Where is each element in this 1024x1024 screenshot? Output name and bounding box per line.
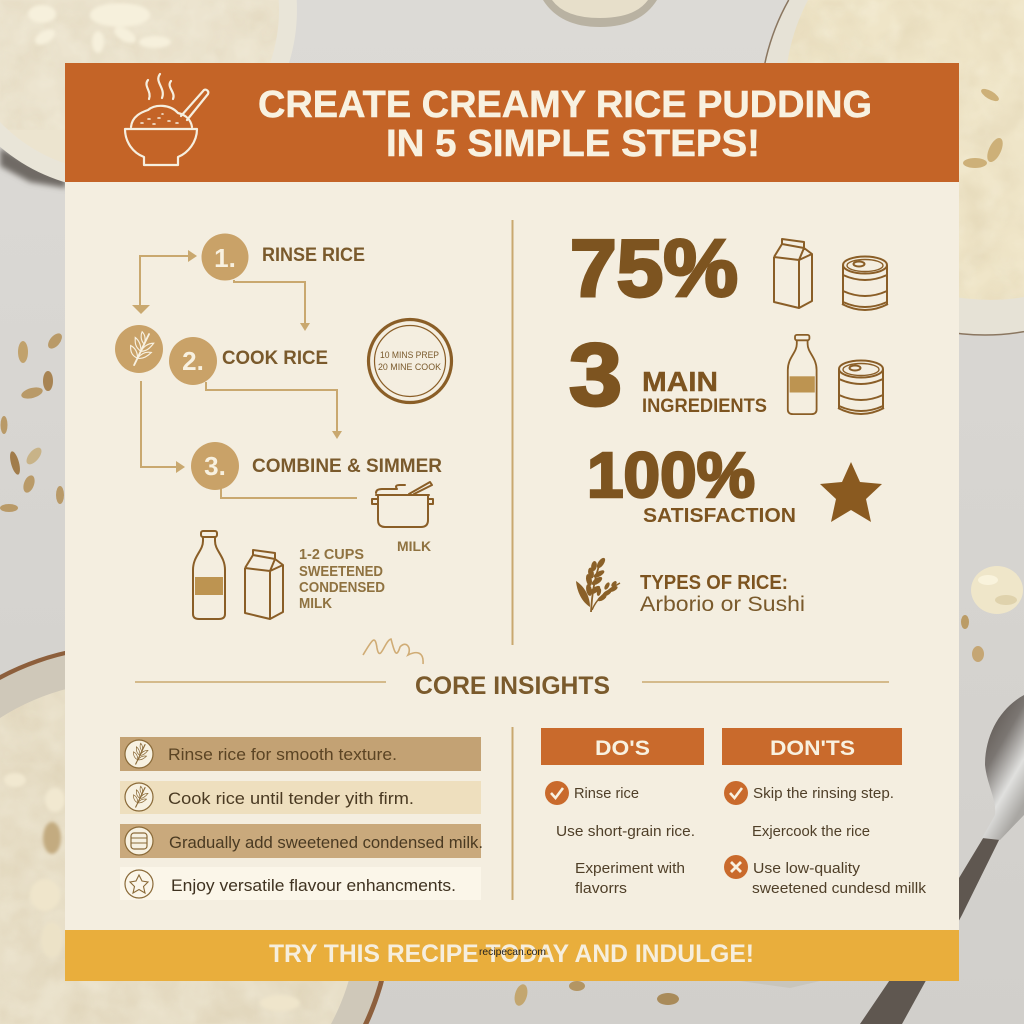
text: condensed milk quantity: [299, 547, 385, 612]
icon: wheat badge: [115, 325, 163, 373]
insight row 2: [120, 781, 481, 814]
do item: short grain rice: Use short-grain rice.: [556, 824, 695, 840]
text: condensed milk quantity: 1-2 CUPS: [299, 547, 364, 563]
timing badge: 10 MINS PREP: [380, 350, 439, 361]
panel: header banner: [65, 63, 959, 182]
insight row 1: [120, 737, 481, 771]
icon: steaming bowl of rice: [125, 74, 208, 165]
don't item: skip rinsing: Skip the rinsing step.: [753, 786, 894, 802]
text: condensed milk quantity: SWEETENED: [299, 564, 383, 580]
title: [258, 84, 872, 165]
icon: milk carton: [245, 550, 283, 619]
insight row 4: [120, 867, 481, 900]
statistic: 75%: 75%: [570, 224, 738, 314]
statistic: 3 main ingredients: INGREDIENTS: [642, 396, 767, 417]
title: CREATE CREAMY RICE PUDDING: [258, 84, 872, 126]
panel: main infographic card: [65, 63, 959, 981]
step 3: 3.: [204, 451, 226, 481]
timing badge: [368, 320, 452, 402]
label: milk: MILK: [397, 538, 431, 554]
step 3: COMBINE & SIMMER: [252, 455, 442, 477]
watermark: recipecan.com: [479, 947, 546, 958]
lower divider: [512, 727, 514, 900]
types of rice: [576, 556, 805, 616]
icon: star: [820, 462, 882, 522]
don't item: low quality: sweetened cundesd millk: [752, 881, 927, 897]
insight row 4: Enjoy versatile flavour enhancments.: [171, 876, 456, 895]
step 3: [191, 442, 442, 490]
icon: milk bottle: [193, 531, 225, 619]
statistic: 100% satisfaction: SATISFACTION: [643, 504, 796, 527]
footer banner: [65, 930, 959, 981]
photo: loose rice grains on the left: [0, 331, 65, 512]
do item: experiment: Experiment with: [575, 861, 685, 877]
photo: small grain bowl at top: [543, 0, 657, 27]
arrow: step 1 to step 2: [234, 280, 310, 331]
photo: bottom-left rice pudding bowl: [0, 644, 393, 1024]
insight row 3: Gradually add sweetened condensed milk.: [169, 833, 483, 852]
heading: core insights: CORE INSIGHTS: [415, 672, 610, 700]
photo: grains under the panel: [512, 981, 820, 1007]
arrow: wheat to step 1: [132, 250, 197, 314]
do item: experiment: flavorrs: [575, 881, 627, 897]
panel: don'ts column: [722, 728, 927, 897]
types of rice: TYPES OF RICE:: [640, 572, 788, 594]
timing badge: 20 MINE COOK: [378, 362, 442, 373]
arrow: step 3 to pot: [221, 488, 357, 498]
icon: wheat: [576, 556, 620, 612]
statistic: 3 main ingredients: MAIN: [642, 366, 718, 397]
photo: silver spoon: [860, 695, 1024, 1024]
step 2: [169, 337, 328, 385]
footer banner: TRY THIS RECIPE TODAY AND INDULGE!: [269, 940, 754, 968]
insight row 3: [120, 824, 483, 858]
step 1: 1.: [214, 243, 236, 273]
insight row 1: Rinse rice for smooth texture.: [168, 745, 397, 764]
do item: rinse rice: [545, 781, 639, 805]
don't item: low quality: Use low-quality: [753, 861, 861, 877]
step 1: [202, 234, 365, 280]
panel: insight list: [120, 737, 483, 900]
arrow: wheat to step 3: [141, 381, 185, 473]
column divider: [512, 220, 514, 645]
statistic: 75%: [570, 224, 888, 314]
text: condensed milk quantity: CONDENSED: [299, 580, 385, 596]
don't item: overcook: Exjercook the rice: [752, 824, 870, 840]
don't item: low quality: [724, 855, 927, 897]
statistic: 3 main ingredients: [569, 325, 884, 424]
do item: rinse rice: Rinse rice: [574, 786, 639, 802]
statistic: 100% satisfaction: 100%: [587, 439, 755, 511]
step 2: 2.: [182, 346, 204, 376]
panel: do's column: [541, 728, 704, 897]
heading: do's: DO'S: [595, 737, 650, 760]
statistic: 100% satisfaction: [587, 439, 882, 527]
photo: rice clump and grains on the right: [961, 566, 1023, 662]
do item: experiment: [575, 861, 685, 897]
heading: do's: [541, 728, 704, 765]
photo: top-right rice pudding bowl: [760, 0, 1024, 335]
icon: carton: [774, 239, 812, 308]
types of rice: Arborio or Sushi: [640, 593, 805, 616]
decorative scribble: [363, 639, 423, 664]
don't item: skip rinsing: [724, 781, 894, 805]
heading: don'ts: [722, 728, 902, 765]
icon: bottle: [788, 335, 817, 414]
icon: can: [838, 360, 884, 414]
icon: pot with spoon: [372, 482, 433, 527]
insight row 2: Cook rice until tender yith firm.: [168, 789, 414, 808]
step 2: COOK RICE: [222, 347, 328, 369]
step 1: RINSE RICE: [262, 244, 365, 266]
text: condensed milk quantity: MILK: [299, 596, 332, 612]
title: IN 5 SIMPLE STEPS!: [386, 123, 760, 165]
heading: don'ts: DON'TS: [770, 737, 855, 760]
statistic: 3 main ingredients: 3: [569, 325, 622, 424]
arrow: step 2 to step 3: [206, 382, 342, 439]
icon: can: [842, 256, 888, 310]
flowchart: cooking steps: [115, 234, 452, 619]
photo: top-left rice pudding bowl: [0, 0, 297, 190]
